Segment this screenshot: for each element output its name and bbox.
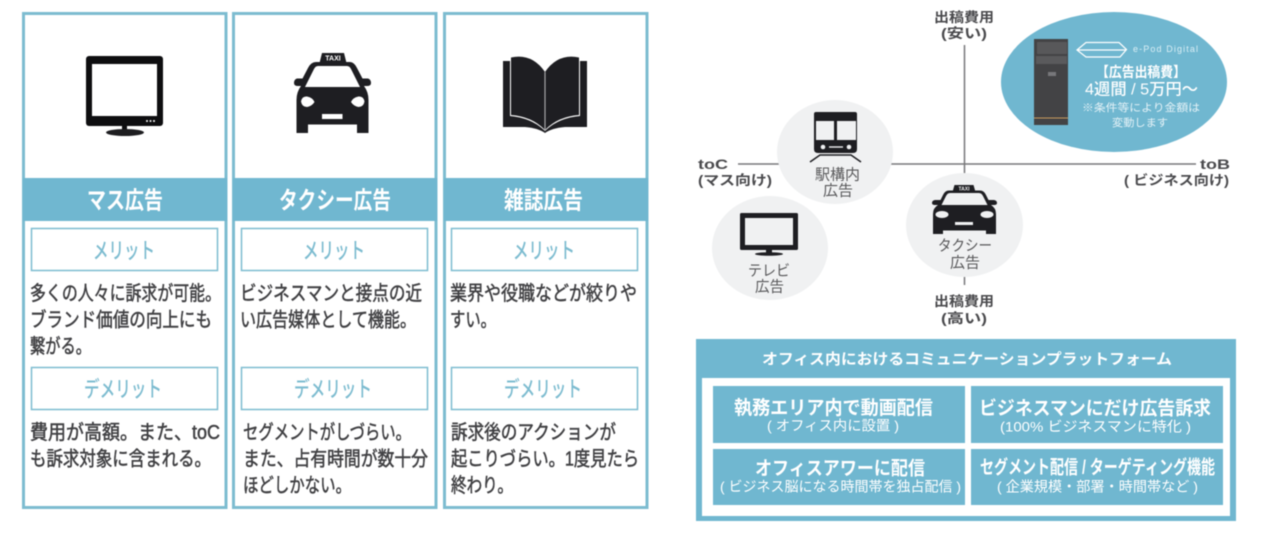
panel heading: オフィス内におけるコミュニケーションプラットフォーム xyxy=(762,351,1172,368)
merit text: mass: 多くの人々に訴求が可能。 xyxy=(30,282,221,305)
demerit text: magazine: 訴求後のアクションが xyxy=(451,421,616,444)
demerit box: taxi xyxy=(242,368,428,410)
feature: office hours: ( ビジネス脳になる時間帯を独占配信 ) xyxy=(720,478,961,494)
merit text: mass: ブランド価値の向上にも xyxy=(30,308,212,332)
feature: business people only: (100% ビジネスマンに特化 ) xyxy=(1000,418,1191,434)
feature: segment delivery xyxy=(971,449,1223,505)
icon: train xyxy=(810,112,861,162)
merit box: magazine xyxy=(452,228,638,270)
demerit text: taxi xyxy=(243,421,428,497)
bubble: station advertising xyxy=(777,100,893,204)
demerit text: taxi: また、占有時間が数十分 xyxy=(243,448,428,470)
demerit box: mass: デメリット xyxy=(84,377,162,402)
feature: business people only: ビジネスマンにだけ広告訴求 xyxy=(979,396,1211,420)
feature: video in work area: ( オフィス内に設置 ) xyxy=(767,418,899,434)
merit box: mass: メリット xyxy=(93,238,155,264)
icon: taxi xyxy=(294,53,371,133)
icon: monitor xyxy=(86,56,163,136)
feature: office hours: オフィスアワーに配信 xyxy=(755,458,925,480)
demerit text: mass: も訴求対象に含まれる。 xyxy=(30,448,211,470)
demerit text: magazine: 終わり。 xyxy=(451,474,513,497)
label: TV xyxy=(748,262,790,296)
label: TV: 広告 xyxy=(755,278,784,296)
feature: segment delivery: ( 企業規模・部署・時間帯など ) xyxy=(997,478,1198,494)
merit text: magazine xyxy=(450,282,637,332)
axis label: low cost: 出稿費用 xyxy=(934,9,994,25)
merit text: taxi xyxy=(240,282,422,332)
axis label: toB: ( ビジネス向け) xyxy=(1124,172,1229,188)
icon: taxi: TAXI xyxy=(325,56,341,62)
label: taxi bubble: 広告 xyxy=(950,254,980,272)
axis label: low cost: (安い) xyxy=(941,26,987,41)
demerit text: mass xyxy=(30,421,220,470)
label: station: 広告 xyxy=(823,182,853,200)
label: station xyxy=(815,166,860,200)
label: taxi bubble xyxy=(938,238,992,272)
axis label: toC: toC xyxy=(698,157,728,172)
merit box: taxi xyxy=(242,228,428,270)
demerit text: magazine xyxy=(451,421,639,497)
bubble: e-Pod Digital price xyxy=(1001,12,1227,152)
demerit box: magazine xyxy=(452,368,638,410)
axis label: high cost: 出稿費用 xyxy=(934,293,994,309)
label: station: 駅構内 xyxy=(815,166,860,184)
logo: e-Pod Digital: e-Pod Digital xyxy=(1133,44,1198,54)
demerit text: taxi: ほどしかない。 xyxy=(243,474,351,497)
demerit text: taxi: セグメントがしづらい。 xyxy=(243,421,411,444)
panel: magazine advertising xyxy=(444,14,648,508)
axis label: toC: (マス向け) xyxy=(698,172,772,188)
label: taxi bubble: タクシー xyxy=(938,238,992,254)
panel: taxi advertising xyxy=(233,14,437,508)
icon: open book xyxy=(503,57,587,133)
merit text: mass: 繋がる。 xyxy=(30,335,91,358)
merit text: taxi: い広告媒体として機能。 xyxy=(240,308,416,332)
demerit text: mass: 費用が高額。また、toC xyxy=(30,421,220,444)
merit box: taxi: メリット xyxy=(303,238,365,264)
panel: office communication platform xyxy=(696,339,1236,521)
merit box: mass xyxy=(32,228,218,270)
logo: e-Pod Digital xyxy=(1077,42,1198,57)
axis label: toB: toB xyxy=(1200,157,1230,172)
panel: mass advertising xyxy=(23,14,227,508)
price text: 変動します xyxy=(1112,116,1168,129)
feature: business people only xyxy=(971,386,1223,443)
merit box: magazine: メリット xyxy=(513,238,575,264)
axis: vertical xyxy=(964,45,966,285)
merit text: magazine: すい。 xyxy=(450,310,496,332)
merit text: magazine: 業界や役職などが絞りや xyxy=(450,282,637,305)
demerit text: magazine: 起こりづらい。1度見たら xyxy=(451,448,639,470)
heading band: magazine xyxy=(444,178,648,221)
price text: ※条件等により金額は xyxy=(1082,101,1200,114)
heading band: taxi xyxy=(233,178,437,221)
demerit box: mass xyxy=(32,368,218,410)
heading band: mass xyxy=(23,178,227,221)
axis label: high cost xyxy=(934,293,994,326)
axis: horizontal xyxy=(738,163,1196,165)
bubble: TV advertising xyxy=(712,196,828,300)
icon: TV xyxy=(740,213,798,256)
merit text: mass xyxy=(30,282,221,358)
heading band: magazine: 雑誌広告 xyxy=(504,188,583,214)
axis label: low cost xyxy=(934,9,994,41)
axis label: toC xyxy=(698,157,772,188)
feature: office hours xyxy=(713,449,965,505)
demerit box: taxi: デメリット xyxy=(294,377,372,402)
icon: kiosk xyxy=(1034,39,1068,125)
feature: video in work area: 執務エリア内で動画配信 xyxy=(734,397,933,419)
heading band: mass: マス広告 xyxy=(87,188,163,214)
bubble: taxi advertising xyxy=(906,173,1023,277)
label: TV: テレビ xyxy=(748,262,790,280)
positioning map xyxy=(698,9,1230,326)
axis label: toB xyxy=(1124,157,1230,188)
price text: 4週間 / 5万円〜 xyxy=(1085,80,1198,98)
axis label: high cost: (高い) xyxy=(941,310,987,326)
icon: small taxi: TAXI xyxy=(958,186,970,192)
feature: video in work area xyxy=(713,386,965,443)
price text: 【広告出稿費】 xyxy=(1096,64,1186,80)
price text xyxy=(1082,64,1200,129)
heading band: taxi: タクシー広告 xyxy=(279,188,391,214)
merit text: taxi: ビジネスマンと接点の近 xyxy=(240,282,422,305)
demerit box: magazine: デメリット xyxy=(504,377,582,402)
